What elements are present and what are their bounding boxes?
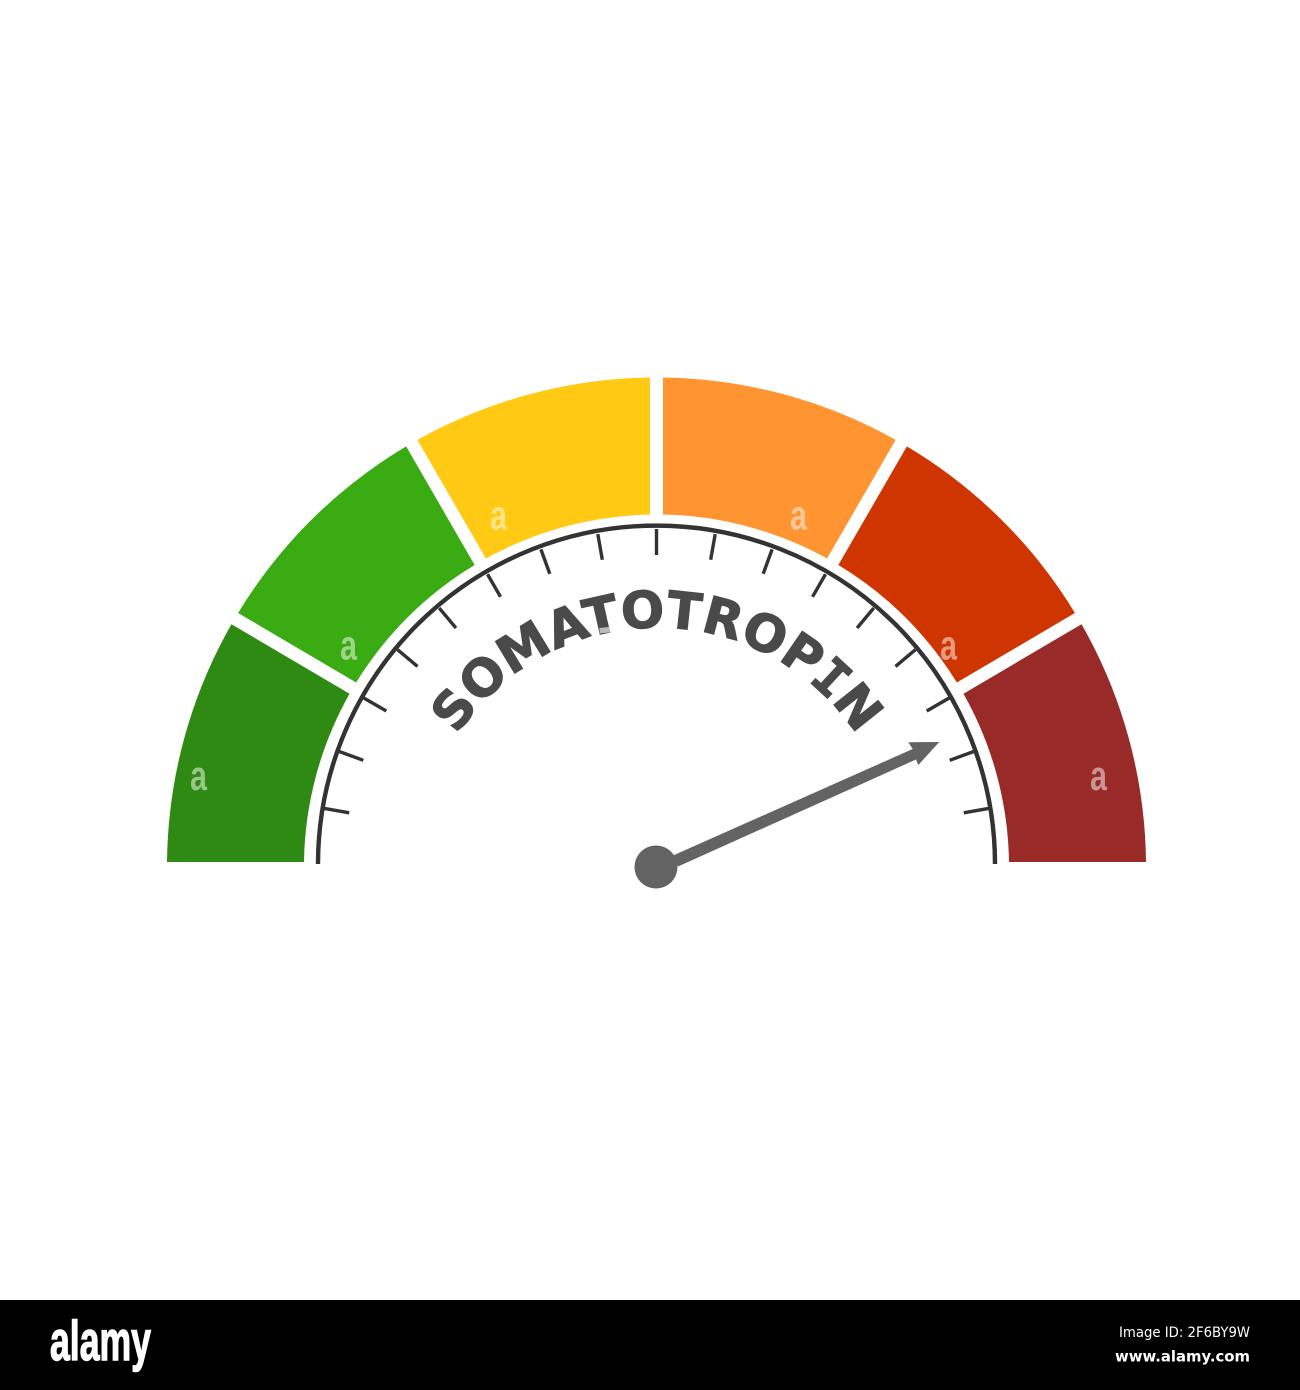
footer bar [0, 1300, 1300, 1390]
segment: dark green [167, 624, 350, 862]
gauge colour band [167, 378, 1146, 862]
segment: green [238, 446, 475, 683]
footer background [0, 1300, 1300, 1390]
needle shaft and arrowhead [673, 742, 939, 866]
needle pointer [634, 742, 939, 888]
scale ticks [324, 529, 989, 813]
scale arc [318, 526, 995, 864]
watermark smudge on letter T [599, 627, 610, 633]
watermark letters on the band: a [940, 622, 957, 669]
watermark letters on the band: a [1090, 752, 1107, 799]
watermark letters on the band: a [190, 752, 207, 799]
segment: yellow [417, 378, 650, 559]
segment: red [838, 446, 1075, 683]
watermark letters on the band: a [490, 492, 507, 539]
watermark letters on the band: a [790, 492, 807, 539]
title: curved gauge label: SOMATOTROPIN [432, 590, 884, 732]
segment: orange [663, 378, 896, 559]
needle hub [634, 846, 678, 888]
image id: Image ID: 2F6BY9W [1119, 1325, 1250, 1341]
watermark letters on the band: a [340, 622, 357, 669]
segment: dark red [963, 624, 1146, 862]
watermark letters on the band [190, 492, 1107, 799]
website: www.alamy.com [1115, 1348, 1250, 1366]
logo: alamy: alamy [50, 1309, 151, 1372]
